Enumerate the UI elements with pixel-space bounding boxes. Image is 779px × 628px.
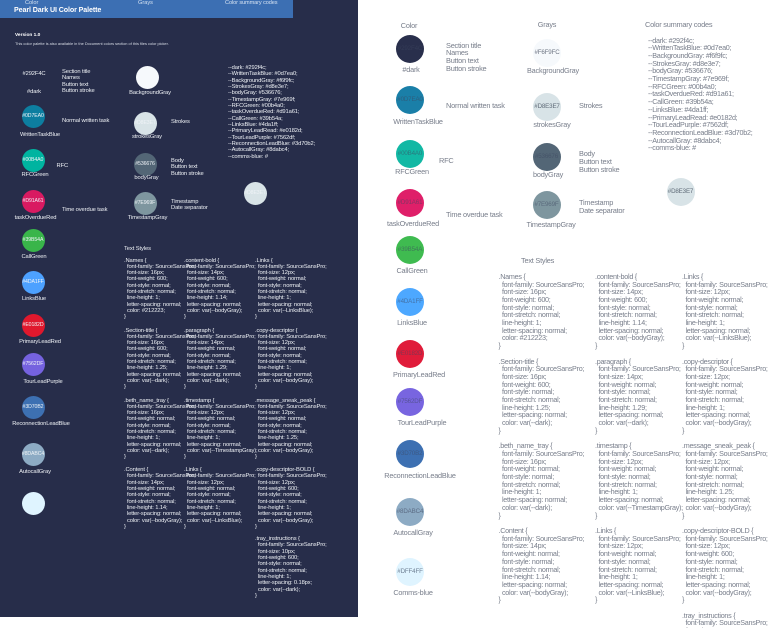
usage: body: Body Button text Button stroke bbox=[171, 158, 204, 177]
swatch: AutocallGray bbox=[22, 443, 44, 466]
swatch: taskOverdueRed: #D91A61 bbox=[23, 198, 43, 204]
swatch: taskOverdueRed bbox=[22, 190, 44, 213]
swatch: LinksBlue: #4DA1FF bbox=[22, 278, 44, 284]
swatch: CallGreen: #39B54A bbox=[23, 236, 43, 242]
label: bodyGray: bodyGray bbox=[533, 170, 563, 179]
swatch: PrimaryLeadRed: #E0182D bbox=[23, 322, 43, 328]
swatch text: dark hex: #292F4C bbox=[22, 70, 46, 76]
swatch label: dark: #dark bbox=[27, 88, 41, 94]
code: timestamp: .timestamp { font-family: SourceSansPro; font-size: 12px; font-weight: normal; font-style: normal; font-stretch: normal; line-height: 1; letter-spacing: normal; color: var(--TimestampGray); } bbox=[595, 441, 683, 520]
swatch: TourLeadPurple: #7562DF bbox=[398, 398, 422, 405]
swatch: taskOverdueRed bbox=[396, 188, 424, 216]
usage: timestamp: Timestamp Date separator bbox=[171, 198, 208, 211]
usage: written task: Normal written task bbox=[446, 100, 505, 110]
label: BackgroundGray: BackgroundGray bbox=[129, 90, 171, 96]
swatch: TourLeadPurple bbox=[396, 388, 424, 416]
swatch: dark: #292F4C bbox=[398, 44, 422, 52]
swatch: BackgroundGray bbox=[533, 39, 561, 67]
swatch: dark bbox=[396, 34, 424, 62]
label: TimestampGray: TimestampGray bbox=[526, 220, 576, 229]
swatch: CallGreen: #39B54A bbox=[398, 246, 422, 253]
usage: RFC: RFC bbox=[56, 163, 68, 169]
usage: overdue: Time overdue task bbox=[62, 207, 107, 213]
label: TourLeadPurple: TourLeadPurple bbox=[23, 378, 63, 384]
heading: color column: Color bbox=[25, 0, 38, 6]
label: TourLeadPurple: TourLeadPurple bbox=[398, 418, 446, 427]
code: Links (third column): .Links { font-family: SourceSansPro; font-size: 12px; font-weight: normal; font-style: normal; font-stretch: normal; line-height: 1; letter-spacing: normal; color: var(--LinksBlue); } bbox=[682, 272, 768, 350]
swatch: WrittenTaskBlue: #0D7EA0 bbox=[22, 113, 44, 119]
usage: dark: Section title Names Button text Button stroke bbox=[446, 40, 486, 73]
usage: overdue: Time overdue task bbox=[446, 210, 502, 219]
code: content-bold: .content-bold { font-family: SourceSansPro; font-size: 14px; font-weight: 600; font-style: normal; font-stretch: normal; line-height: 1.14; letter-spacing: normal; color: var(--bodyGray); } bbox=[595, 272, 681, 350]
label: LinksBlue: LinksBlue bbox=[22, 296, 46, 302]
code: message_sneak_peak: .message_sneak_peak { font-family: SourceSansPro; font-size: 12px; font-weight: normal; font-style: normal; font-stretch: normal; line-height: 1.25; letter-spacing: normal; color: var(--bodyGray); } bbox=[255, 398, 327, 460]
code: Content: .Content { font-family: SourceSansPro; font-size: 14px; font-weight: normal; font-style: normal; font-stretch: normal; line-height: 1.14; letter-spacing: normal; color: var(--bodyGray); } bbox=[124, 467, 196, 530]
label: CallGreen: CallGreen bbox=[396, 266, 428, 275]
heading: color column: Color bbox=[401, 21, 417, 30]
version label: Version 1.0 bbox=[15, 33, 40, 38]
label: CallGreen: CallGreen bbox=[21, 254, 47, 260]
usage: dark: Section title Names Button text Button stroke bbox=[62, 69, 95, 94]
label: LinksBlue: LinksBlue bbox=[397, 318, 427, 327]
swatch: LinksBlue bbox=[22, 270, 44, 294]
swatch: ReconnectionLeadBlue: #3D70B2 bbox=[398, 450, 422, 457]
code: Content: .Content { font-family: SourceSansPro; font-size: 14px; font-weight: normal; font-style: normal; font-stretch: normal; line-height: 1.14; letter-spacing: normal; color: var(--bodyGray); } bbox=[498, 526, 584, 604]
swatch: strokesGray: #D8E3E7 bbox=[134, 120, 156, 126]
code: content-bold: .content-bold { font-family: SourceSansPro; font-size: 14px; font-weight: 600; font-style: normal; font-stretch: normal; line-height: 1.14; letter-spacing: normal; color: var(--bodyGray); } bbox=[184, 258, 256, 320]
description: This color palette is also available in the Document colors section of this files color picker. bbox=[15, 41, 169, 46]
code: paragraph: .paragraph { font-family: SourceSansPro; font-size: 14px; font-weight: normal; font-style: normal; font-stretch: normal; line-height: 1.29; letter-spacing: normal; color: var(--dark); } bbox=[595, 356, 681, 435]
panel: dark theme palette bbox=[0, 0, 358, 617]
code: Links: .Links { font-family: SourceSansPro; font-size: 12px; font-weight: normal; font-style: normal; font-stretch: normal; line-height: 1; letter-spacing: normal; color: var(--LinksBlue); } bbox=[595, 526, 681, 604]
swatch: RFCGreen: #00B4A0 bbox=[398, 150, 422, 156]
usage: timestamp: Timestamp Date separator bbox=[579, 198, 625, 215]
swatch: ReconnectionLeadBlue bbox=[396, 440, 424, 468]
code: Names: .Names { font-family: SourceSansPro; font-size: 16px; font-weight: 600; font-style: normal; font-stretch: normal; line-height: 1; letter-spacing: normal; color: #212223; } bbox=[124, 258, 196, 320]
label: taskOverdueRed: taskOverdueRed bbox=[15, 215, 56, 221]
code: Section-title: .Section-title { font-family: SourceSansPro; font-size: 16px; font-weight: 600; font-style: normal; font-stretch: normal; line-height: 1.25; letter-spacing: normal; color: var(--dark); } bbox=[498, 356, 584, 435]
label: AutocallGray: AutocallGray bbox=[19, 468, 51, 474]
label: RFCGreen: RFCGreen bbox=[395, 166, 429, 176]
panel: light theme palette bbox=[358, 0, 779, 628]
code: timestamp: .timestamp { font-family: SourceSansPro; font-size: 12px; font-weight: normal; font-style: normal; font-stretch: normal; line-height: 1; letter-spacing: normal; color: var(--TimestampGray); } bbox=[184, 398, 258, 460]
swatch: LinksBlue bbox=[396, 288, 424, 316]
label: Comms-blue: Comms-blue bbox=[393, 588, 433, 597]
label: AutocallGray: AutocallGray bbox=[393, 528, 433, 537]
swatch: TimestampGray: #7E969F bbox=[534, 200, 559, 208]
swatch: strokesGray: #D8E3E7 bbox=[534, 103, 560, 110]
heading: color summary codes: Color summary codes bbox=[225, 0, 278, 6]
code: beth_name_tray: .beth_name_tray { font-family: SourceSansPro; font-size: 16px; font-weight: normal; font-style: normal; font-stretch: normal; line-height: 1; letter-spacing: normal; color: var(--dark); } bbox=[124, 398, 196, 460]
label: RFCGreen: RFCGreen bbox=[21, 172, 49, 178]
heading: text styles: Text Styles bbox=[521, 256, 554, 265]
code: copy-descriptor-BOLD: .copy-descriptor-BOLD { font-family: SourceSansPro; font-size: 12px; font-weight: 600; font-style: normal; font-stretch: normal; line-height: 1; letter-spacing: normal; color: var(--bodyGray); } bbox=[255, 467, 327, 530]
swatch: extra stroke gray bbox=[244, 182, 266, 204]
swatch: Comms-blue bbox=[22, 492, 44, 514]
heading: grays column: Grays bbox=[138, 0, 153, 6]
swatch: Comms-blue: #DFF4FF bbox=[397, 568, 423, 574]
swatch: RFCGreen: #00B4A0 bbox=[23, 157, 43, 163]
swatch: strokesGray bbox=[134, 112, 156, 134]
code: Names: .Names { font-family: SourceSansPro; font-size: 16px; font-weight: 600; font-style: normal; font-stretch: normal; line-height: 1; letter-spacing: normal; color: #212223; } bbox=[498, 272, 584, 350]
code: Links (third column): .Links { font-family: SourceSansPro; font-size: 12px; font-weight: normal; font-style: normal; font-stretch: normal; line-height: 1; letter-spacing: normal; color: var(--LinksBlue); } bbox=[255, 258, 327, 320]
code: message_sneak_peak: .message_sneak_peak { font-family: SourceSansPro; font-size: 12px; font-weight: normal; font-style: normal; font-stretch: normal; line-height: 1.25; letter-spacing: normal; color: var(--bodyGray); } bbox=[682, 441, 768, 520]
usage: RFC: RFC bbox=[439, 156, 453, 165]
swatch: AutocallGray bbox=[396, 498, 424, 526]
label: taskOverdueRed: taskOverdueRed bbox=[387, 219, 439, 228]
swatch: ReconnectionLeadBlue: #3D70B2 bbox=[23, 404, 43, 410]
label: strokesGray: strokesGray bbox=[533, 120, 571, 129]
swatch: PrimaryLeadRed bbox=[22, 314, 44, 336]
swatch: AutocallGray: #8DABC4 bbox=[22, 451, 44, 457]
usage: strokes: Strokes bbox=[579, 101, 602, 110]
title: Pearl Dark UI Color Palette bbox=[14, 6, 101, 14]
swatch: extra stroke gray bbox=[666, 178, 694, 206]
swatch: BackgroundGray bbox=[136, 66, 158, 88]
label: PrimaryLeadRed: PrimaryLeadRed bbox=[19, 338, 61, 344]
swatch: RFCGreen bbox=[22, 149, 44, 172]
code: copy-descriptor-BOLD: .copy-descriptor-BOLD { font-family: SourceSansPro; font-size: 12px; font-weight: 600; font-style: normal; font-stretch: normal; line-height: 1; letter-spacing: normal; color: var(--bodyGray); } bbox=[682, 526, 768, 604]
code: paragraph: .paragraph { font-family: SourceSansPro; font-size: 14px; font-weight: normal; font-style: normal; font-stretch: normal; line-height: 1.29; letter-spacing: normal; color: var(--dark); } bbox=[184, 328, 256, 390]
color summary codes: --dark: #292f4c; --WrittenTaskBlue: #0d7ea0; --BackgroundGray: #f6f9fc; --StrokesGray: #d8e3e7; --bodyGray: #536676; --TimestampGray: #7e969f; --RFCGreen: #00b4a0; --taskOverdueRed: #d91a61; --CallGreen: #39b54a; --LinksBlue: #4da1ff; --PrimaryLeadRead: #e0182d; --TourLeadPurple: #7562df; --ReconnectionLeadBlue: #3d70b2; --AutocallGray: #8dabc4; --comms-blue: # bbox=[648, 36, 752, 152]
heading: color summary codes: Color summary codes bbox=[645, 20, 712, 29]
label: dark: #dark bbox=[402, 65, 420, 74]
swatch: taskOverdueRed: #D91A61 bbox=[398, 198, 422, 206]
swatch: PrimaryLeadRed bbox=[396, 340, 424, 368]
label: ReconnectionLeadBlue: ReconnectionLeadBlue bbox=[384, 470, 456, 480]
swatch: TimestampGray: #7E969F bbox=[135, 200, 155, 206]
swatch: BackgroundGray: #F6F9FC bbox=[534, 49, 560, 56]
swatch: AutocallGray: #8DABC4 bbox=[397, 508, 423, 515]
swatch: WrittenTaskBlue: #0D7EA0 bbox=[397, 96, 423, 102]
swatch: TimestampGray bbox=[134, 192, 156, 214]
swatch: CallGreen bbox=[396, 236, 424, 264]
swatch: RFCGreen bbox=[396, 140, 424, 168]
header bar bbox=[0, 0, 293, 18]
swatch: TimestampGray bbox=[532, 190, 560, 218]
swatch: strokesGray bbox=[533, 93, 561, 121]
code: copy-descriptor: .copy-descriptor { font-family: SourceSansPro; font-size: 12px; font-weight: normal; font-style: normal; font-stretch: normal; line-height: 1; letter-spacing: normal; color: var(--bodyGray); } bbox=[682, 356, 768, 435]
label: strokesGray: strokesGray bbox=[132, 134, 162, 140]
swatch: bodyGray bbox=[532, 143, 560, 171]
usage: written task: Normal written task bbox=[62, 118, 109, 124]
label: BackgroundGray: BackgroundGray bbox=[527, 66, 579, 75]
swatch: PrimaryLeadRed: #E0182D bbox=[398, 350, 422, 356]
label: WrittenTaskBlue: WrittenTaskBlue bbox=[20, 132, 60, 138]
code: tray_instructions: .tray_instructions { font-family: SourceSansPro; font-size: 10px; font-weight: 600; font-style: normal; font-stretch: normal; line-height: 1; letter-spacing: 0.18px; color: var(--dark); } bbox=[255, 536, 327, 599]
code: Links: .Links { font-family: SourceSansPro; font-size: 12px; font-weight: normal; font-style: normal; font-stretch: normal; line-height: 1; letter-spacing: normal; color: var(--LinksBlue); } bbox=[184, 467, 256, 530]
swatch: extra stroke gray: #D8E3E7 bbox=[668, 188, 693, 195]
swatch: WrittenTaskBlue bbox=[22, 105, 44, 128]
code: Section-title: .Section-title { font-family: SourceSansPro; font-size: 16px; font-weight: 600; font-style: normal; font-stretch: normal; line-height: 1.25; letter-spacing: normal; color: var(--dark); } bbox=[124, 328, 196, 390]
heading: grays column: Grays bbox=[538, 20, 556, 29]
label: TimestampGray: TimestampGray bbox=[128, 215, 167, 221]
swatch: ReconnectionLeadBlue bbox=[22, 396, 44, 418]
swatch: TourLeadPurple bbox=[22, 353, 44, 376]
swatch: bodyGray bbox=[134, 152, 156, 176]
swatch: Comms-blue bbox=[396, 558, 424, 586]
code: copy-descriptor: .copy-descriptor { font-family: SourceSansPro; font-size: 12px; font-weight: normal; font-style: normal; font-stretch: normal; line-height: 1; letter-spacing: normal; color: var(--bodyGray); } bbox=[255, 328, 327, 390]
label: WrittenTaskBlue: WrittenTaskBlue bbox=[393, 117, 443, 126]
swatch: bodyGray: #536676 bbox=[535, 153, 558, 160]
code: beth_name_tray: .beth_name_tray { font-family: SourceSansPro; font-size: 16px; font-weight: normal; font-style: normal; font-stretch: normal; line-height: 1; letter-spacing: normal; color: var(--dark); } bbox=[498, 441, 584, 520]
heading: text styles: Text Styles bbox=[124, 246, 151, 252]
label: bodyGray: bodyGray bbox=[134, 174, 159, 180]
swatch: extra stroke gray: #D8E3E7 bbox=[244, 190, 266, 196]
color summary codes: --dark: #292f4c; --WrittenTaskBlue: #0d7ea0; --BackgroundGray: #f6f9fc; --StrokesGray: #d8e3e7; --bodyGray: #536676; --TimestampGray: #7e969f; --RFCGreen: #00b4a0; --taskOverdueRed: #d91a61; --CallGreen: #39b54a; --LinksBlue: #4da1ff; --PrimaryLeadRead: #e0182d; --TourLeadPurple: #7562df; --ReconnectionLeadBlue: #3d70b2; --AutocallGray: #8dabc4; --comms-blue: # bbox=[228, 65, 315, 160]
label: PrimaryLeadRed: PrimaryLeadRed bbox=[393, 370, 445, 379]
usage: body: Body Button text Button stroke bbox=[579, 149, 619, 174]
label: ReconnectionLeadBlue: ReconnectionLeadBlue bbox=[12, 421, 70, 427]
usage: strokes: Strokes bbox=[171, 119, 190, 125]
swatch: TourLeadPurple: #7562DF bbox=[23, 361, 43, 367]
swatch: CallGreen bbox=[22, 228, 44, 252]
swatch: WrittenTaskBlue bbox=[396, 86, 424, 114]
swatch: bodyGray: #536676 bbox=[135, 160, 155, 166]
swatch: LinksBlue: #4DA1FF bbox=[397, 298, 423, 304]
